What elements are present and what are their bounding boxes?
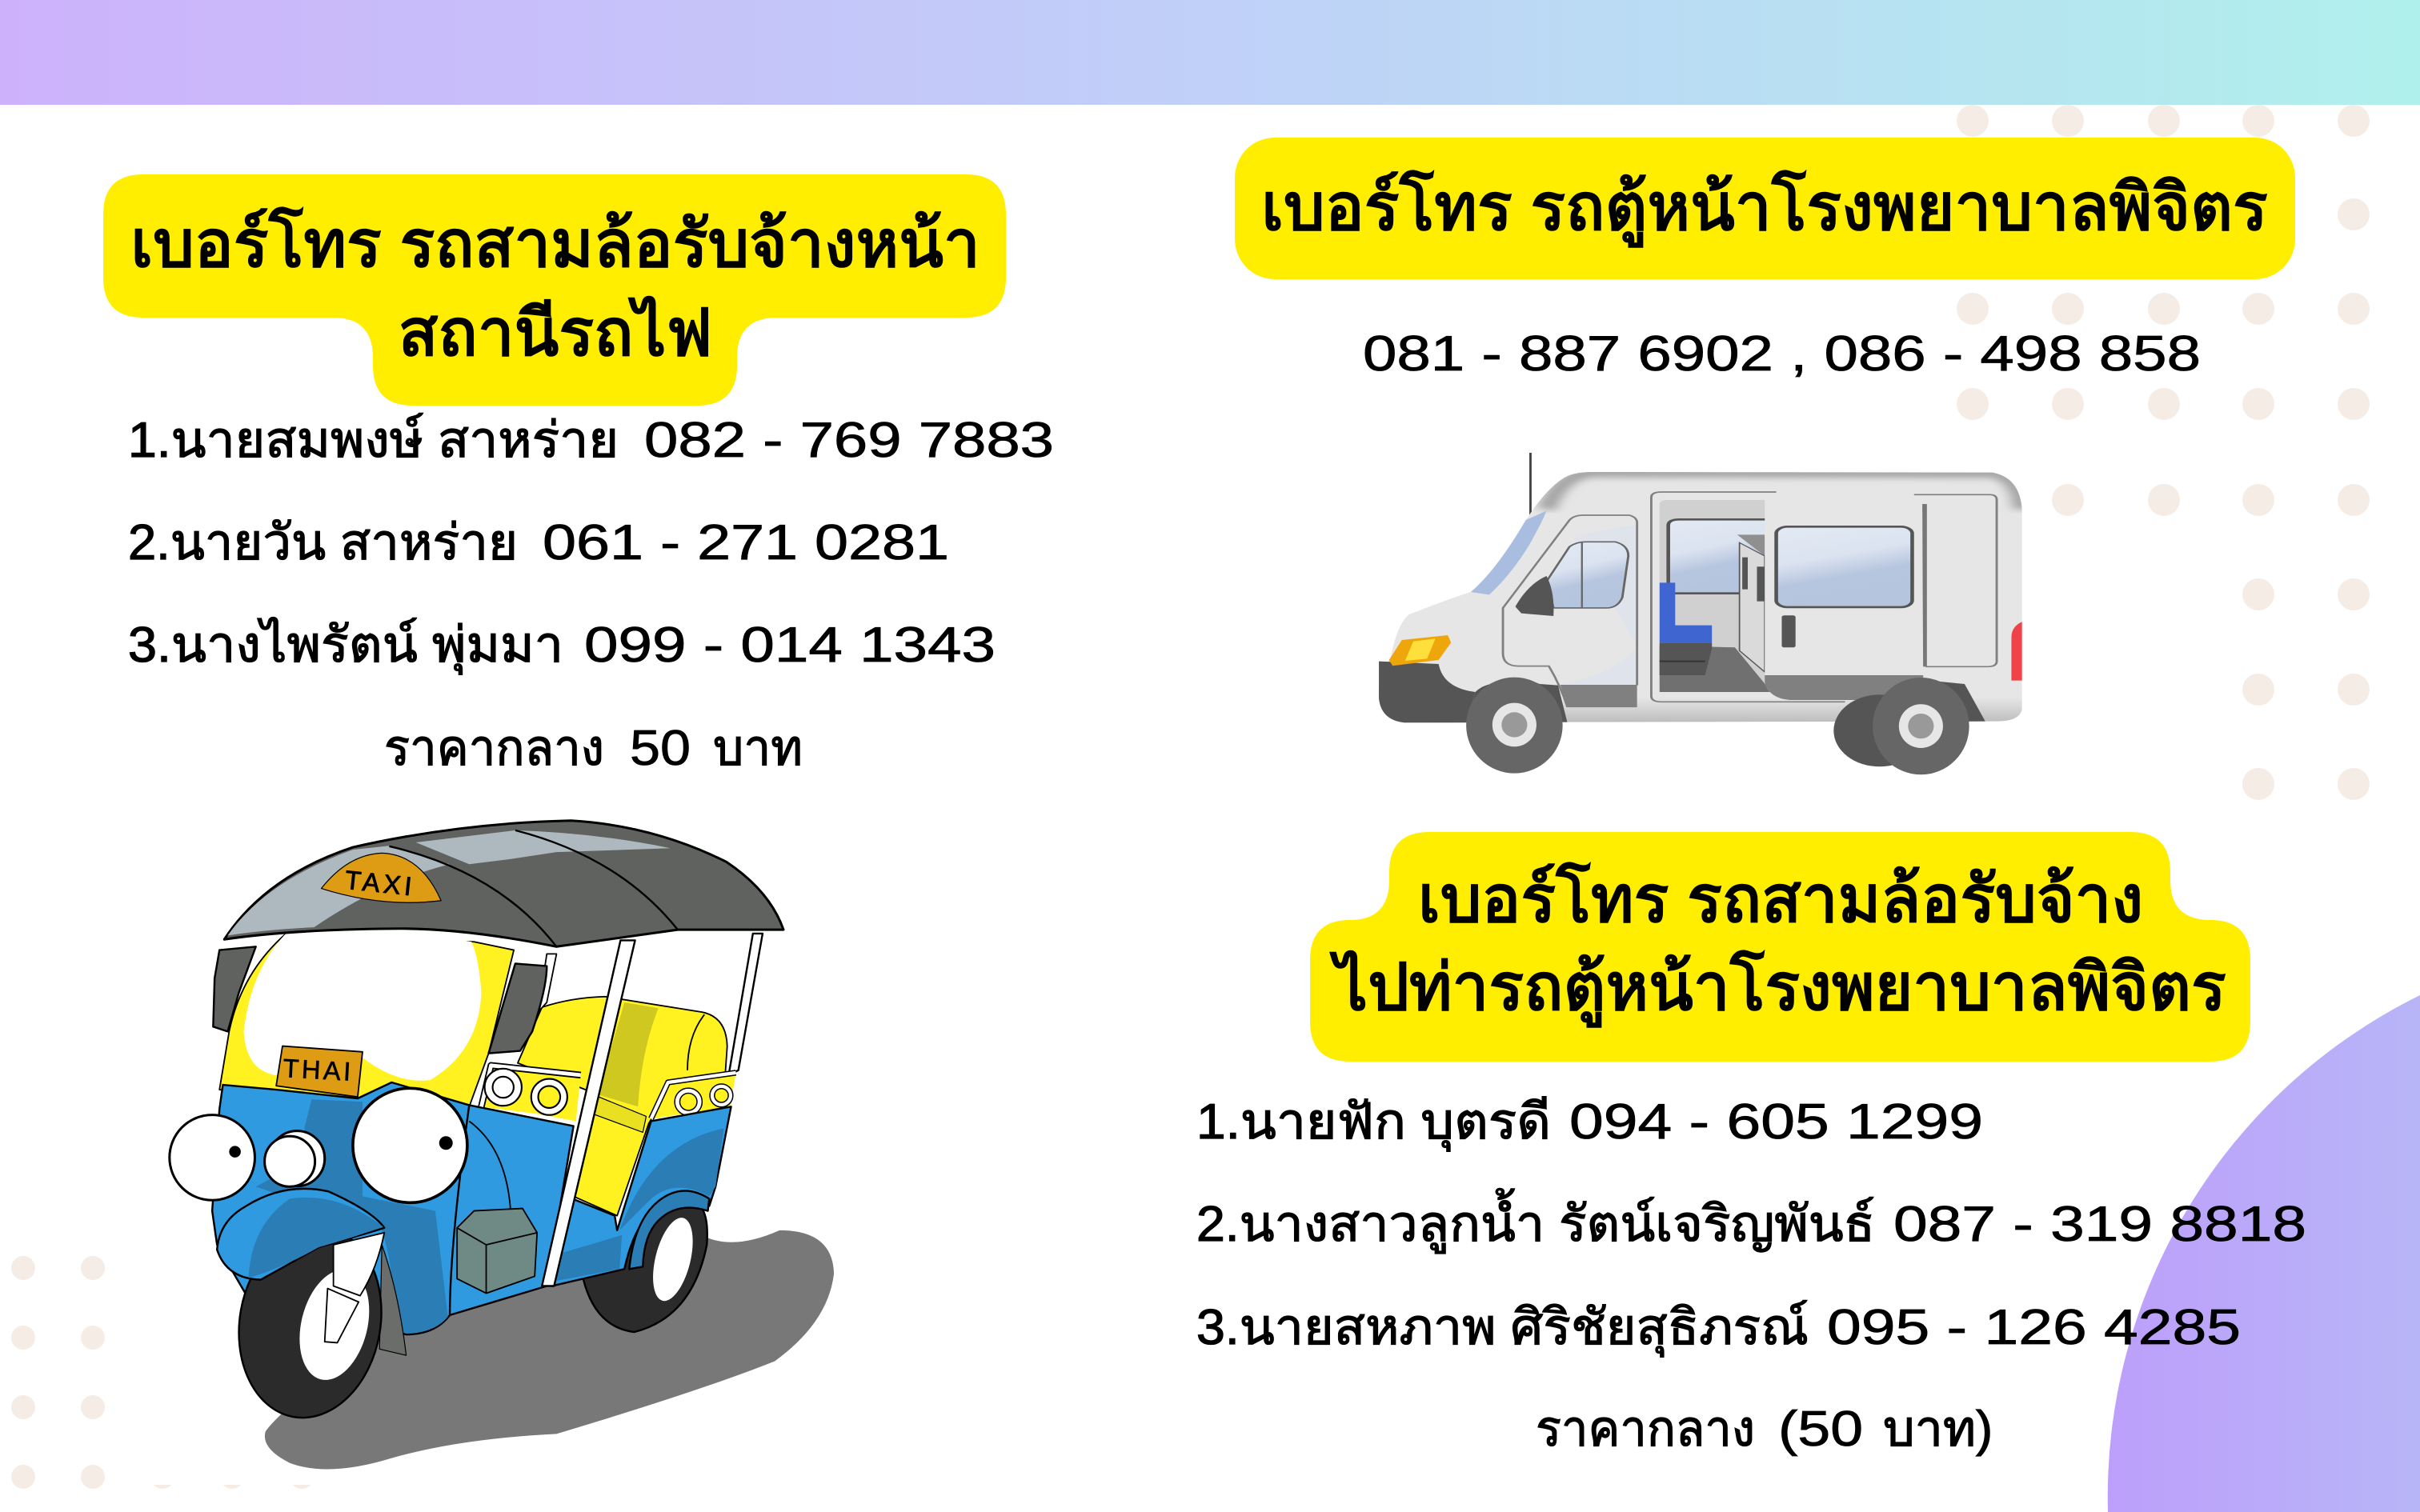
antenna: [1529, 453, 1533, 520]
TAXI sign: [321, 853, 441, 902]
front mudguard: [379, 1245, 407, 1355]
headlight right: [353, 1088, 467, 1202]
list: tuk-tuk drivers to the van stand: 094 - 605 1299: [1569, 1094, 1983, 1150]
price: hospital tuk-tuk: [1536, 1402, 1993, 1457]
headlight: [1389, 635, 1451, 666]
sliding door opening: [1651, 492, 1845, 702]
heading: tuk-tuk to the van stand: ไปท่ารถตู้หน้าโรงพยาบาลพิจิตร: [1328, 950, 2226, 1028]
front fender: [217, 1189, 384, 1280]
list: tuk-tuk drivers at the station: 082 - 769 7883: [644, 413, 1054, 468]
phone numbers: van: 081 - 887 6902 , 086 - 498 858: [1363, 326, 2201, 382]
side panels grey: [213, 946, 547, 1054]
front railing: [481, 1066, 581, 1121]
price: hospital tuk-tuk: (50: [1778, 1402, 1863, 1457]
list: tuk-tuk drivers at the station: 061 - 271 0281: [543, 515, 949, 570]
THAI plate: THAI: [282, 1053, 351, 1086]
price: station tuk-tuk: ราคากลาง: [384, 721, 604, 776]
TAXI sign: TAXI: [343, 865, 413, 901]
van roof shading: [1547, 472, 2022, 510]
front fork: [325, 1233, 384, 1342]
tail light: [2011, 622, 2022, 681]
heading: tuk-tuk near the station: สถานีรถไฟ: [399, 295, 712, 370]
ground shadow: [265, 1230, 834, 1469]
price: station tuk-tuk: [384, 721, 803, 776]
decorative dots: top right: [1957, 105, 2370, 800]
headlight left: [170, 1115, 254, 1200]
header gradient band: [0, 0, 2420, 105]
decorative purple circle bottom right: [2108, 995, 2420, 1512]
rear pole: [729, 934, 763, 1075]
decorative dots: bottom left: [11, 1256, 314, 1489]
price: hospital tuk-tuk: บาท): [1883, 1402, 1993, 1457]
rear panel: [1914, 494, 1997, 666]
front wheel: [1466, 678, 1563, 774]
heading: tuk-tuk near the station: [103, 174, 1006, 406]
rear wheels: [1833, 678, 1969, 774]
heading: van in front of the hospital: เบอร์โทร รถตู้หน้าโรงพยาบาลพิจิตร: [1261, 170, 2268, 248]
list: tuk-tuk drivers to the van stand: 3.นายสหภาพ ศิริชัยสุธิภรณ์: [1196, 1300, 1809, 1357]
list: tuk-tuk drivers at the station: 3.นางไพรัตน์ พุ่มมา: [128, 617, 563, 674]
van body: [1379, 472, 2022, 722]
yellow seat: [518, 997, 727, 1216]
list: tuk-tuk drivers at the station: 1.นายสมพงษ์ สาหร่าย: [128, 413, 619, 468]
list: tuk-tuk drivers at the station: 099 - 014 1343: [584, 618, 996, 673]
roof: [224, 821, 783, 946]
price: station tuk-tuk: 50: [630, 721, 691, 776]
list: tuk-tuk drivers at the station: [128, 413, 1054, 674]
windshield: [1471, 510, 1547, 594]
front door: [1503, 515, 1637, 706]
illustration: passenger van: [1379, 453, 2022, 774]
windshield: [244, 930, 481, 1081]
list: tuk-tuk drivers to the van stand: 2.นางสาวลูกน้ำ รัตน์เจริญพันธ์: [1196, 1188, 1875, 1254]
heading: tuk-tuk to the van stand: [1310, 832, 2250, 1062]
rear wheel: [583, 1203, 707, 1332]
small lamp: [265, 1131, 325, 1186]
illustration: tuk-tuk: [144, 774, 862, 1485]
cab yellow: [219, 934, 514, 1106]
side body: [431, 1105, 731, 1315]
van front bumper: [1379, 662, 1476, 722]
THAI plate: [276, 1046, 363, 1097]
main pole: [542, 940, 635, 1286]
list: tuk-tuk drivers to the van stand: 095 - 126 4285: [1827, 1300, 2241, 1355]
rear railing: [651, 1073, 736, 1118]
heading: tuk-tuk to the van stand: เบอร์โทร รถสามล้อรับจ้าง: [1418, 862, 2143, 936]
list: tuk-tuk drivers at the station: 2.นายวัน สาหร่าย: [128, 515, 518, 570]
front wheel: [224, 1216, 396, 1429]
price: hospital tuk-tuk: ราคากลาง: [1536, 1402, 1755, 1457]
price: station tuk-tuk: บาท: [713, 721, 803, 776]
battery box: [457, 1209, 537, 1294]
sliding door: [1765, 494, 1927, 700]
wheel arches: [1466, 678, 1567, 722]
list: tuk-tuk drivers to the van stand: [1196, 1094, 2306, 1357]
heading: van in front of the hospital: [1235, 138, 2295, 279]
list: tuk-tuk drivers to the van stand: 087 - 319 8818: [1893, 1197, 2306, 1252]
front body blue: [212, 1082, 469, 1334]
heading: tuk-tuk near the station: เบอร์โทร รถสามล้อรับจ้างหน้า: [130, 206, 980, 281]
list: tuk-tuk drivers to the van stand: 1.นายฟัก บุตรดี: [1196, 1094, 1551, 1151]
front post: [538, 954, 556, 1012]
